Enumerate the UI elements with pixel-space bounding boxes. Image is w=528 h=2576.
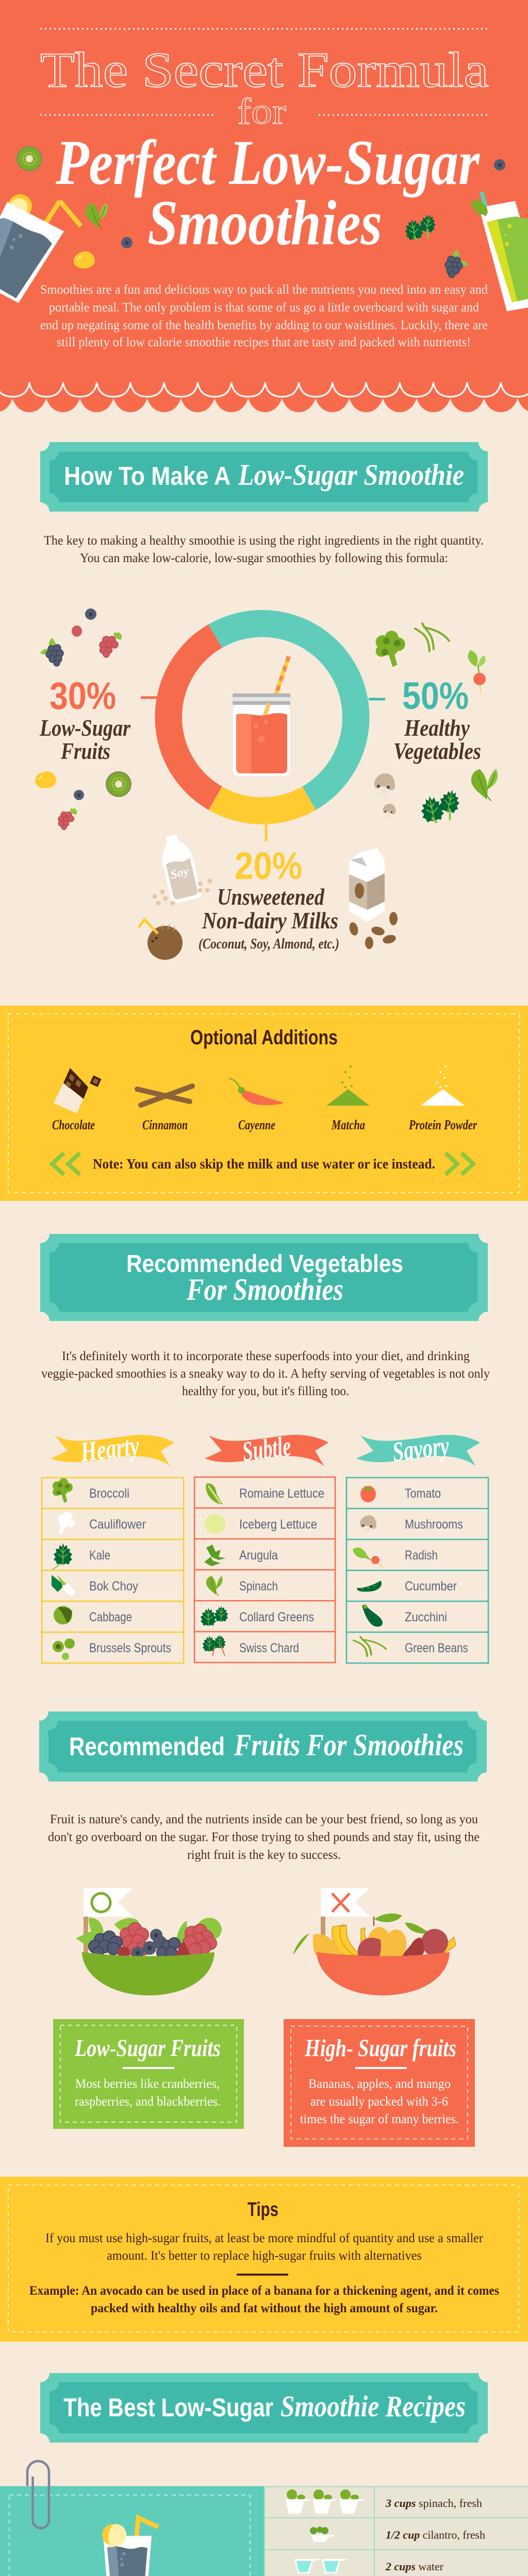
- icon: iceberg lettuce: [205, 1514, 225, 1534]
- icon: cabbage: [54, 1606, 72, 1624]
- label: 20% unsweetened non-dairy milks: (Coconut, Soy, Almond, etc.): [199, 936, 339, 952]
- title line: The Secret Formula: The Secret Formula: [40, 42, 489, 97]
- icon: cinnamon: [137, 1086, 192, 1105]
- icon: brussels sprouts: [53, 1638, 75, 1660]
- icon: almond milk carton: [348, 848, 398, 949]
- intro paragraph: Smoothies are a fun and delicious way to pack all the nutrients you need into an easy and: [40, 283, 488, 297]
- recipe: Lemon Blueberry Cooler: [0, 2461, 528, 2576]
- label: 30% low-sugar fruits: 30%: [50, 674, 116, 717]
- title word: for: for: [237, 91, 286, 132]
- icon: green beans: [354, 1637, 386, 1656]
- icon: kiwi: [16, 146, 42, 172]
- banner: How To Make A Low-Sugar Smoothie: Low-Sugar Smoothie: [238, 458, 464, 492]
- banner: Recommended Vegetables For Smoothies: Recommended Vegetables: [126, 1250, 403, 1278]
- labels: additions: Cayenne: [238, 1117, 275, 1132]
- table: subtle vegetables: Arugula: [239, 1548, 278, 1563]
- icon: kale: [53, 1543, 72, 1569]
- table: hearty vegetables: Kale: [89, 1548, 110, 1563]
- label: 50% healthy vegetables: Healthy: [404, 715, 470, 741]
- text: vegetables intro: It's definitely worth it to incorporate these superfoods into your diet, and drinking: [62, 1349, 470, 1363]
- panel: header: [0, 0, 528, 413]
- icon: broccoli: [53, 1478, 73, 1503]
- card: high-sugar fruits: are usually packed with 3-6: [310, 2095, 448, 2109]
- label: 20% unsweetened non-dairy milks: 20%: [235, 844, 302, 887]
- ribbon: Savory: [356, 1430, 480, 1467]
- text: vegetables intro: healthy for you, but it's filling too.: [182, 1384, 349, 1398]
- icon: mushroom: [360, 1515, 376, 1533]
- card: high-sugar fruits: High- Sugar fruits: [304, 2035, 456, 2062]
- intro paragraph: end up negating some of the health benefits by adding to our waistlines. Luckily, there are: [40, 318, 488, 332]
- card: low-sugar fruits: [53, 2019, 244, 2129]
- table: ingredients: 3 cups spinach, fresh: [385, 2497, 482, 2510]
- icon: tomato: [360, 1486, 376, 1502]
- icon: smoothie jar: [232, 656, 291, 776]
- table: savory vegetables: Mushrooms: [405, 1517, 463, 1532]
- icon: high-sugar fruit bowl: [293, 1888, 456, 1995]
- icon: blueberry left: [121, 237, 133, 248]
- banner: The Best Low-Sugar Smoothie Recipes: [40, 2373, 488, 2443]
- card: low-sugar fruits: Low-Sugar Fruits: [74, 2035, 221, 2062]
- icon: romaine: [206, 1483, 223, 1504]
- text: vegetables intro: veggie-packed smoothies is a sneaky way to do it. A hefty serving of vegetables is not only: [41, 1367, 490, 1381]
- table: hearty vegetables: Cabbage: [89, 1610, 132, 1624]
- text: formula intro: [44, 534, 484, 565]
- text: fruits intro: don't go overboard on the sugar. For those trying to shed pounds and stay fit, using the: [48, 1830, 480, 1844]
- text: vegetables intro: [41, 1349, 490, 1398]
- text: tip body: If you must use high-sugar fruits, at least be more mindful of quantity and use a smaller: [45, 2231, 484, 2245]
- text: tip example: Example: An avocado can be used in place of a banana for a thickening agent, and it comes: [29, 2284, 499, 2298]
- heading: Tips: Tips: [248, 2199, 278, 2221]
- icon: soy milk bottle: Soy: [169, 865, 190, 882]
- table: subtle vegetables: Romaine Lettuce: [239, 1486, 324, 1501]
- chart: formula donut: [141, 623, 385, 841]
- icon: zucchini: [362, 1604, 383, 1626]
- icon: radish: [353, 1548, 383, 1567]
- icon: coconut: [139, 920, 183, 960]
- labels: additions: Cinnamon: [142, 1117, 188, 1132]
- text: formula intro: You can make low-calorie, low-sugar smoothies by following this formula:: [80, 551, 448, 565]
- label: 50% healthy vegetables: Vegetables: [393, 738, 481, 764]
- text: fruits intro: Fruit is nature's candy, and the nutrients inside can be your best friend, so long as you: [50, 1812, 478, 1826]
- banner: How To Make A Low-Sugar Smoothie: [40, 442, 488, 512]
- table: savory vegetables: Radish: [405, 1548, 438, 1563]
- icons: fruits group: [35, 608, 131, 829]
- icon: spinach: [86, 202, 108, 229]
- text: tip example: packed with healthy oils and fat without the high amount of sugar.: [91, 2301, 438, 2315]
- card: high-sugar fruits: times the sugar of many berries.: [300, 2112, 459, 2126]
- table: subtle vegetables: [194, 1477, 335, 1663]
- table: hearty vegetables: [42, 1478, 184, 1663]
- table: subtle vegetables: Iceberg Lettuce: [239, 1517, 317, 1532]
- banner: The Best Low-Sugar Smoothie Recipes: Smoothie Recipes: [280, 2389, 466, 2423]
- label: 30% low-sugar fruits: Low-Sugar: [39, 715, 131, 741]
- title line: Smoothies: Smoothies: [147, 188, 382, 258]
- icon: low-sugar berry bowl: [76, 1888, 222, 1995]
- table: savory vegetables: Tomato: [405, 1486, 441, 1501]
- intro paragraph: portable meal. The only problem is that some of us go a little overboard with sugar and: [49, 301, 479, 314]
- text: tip body: amount. It's better to replace high-sugar fruits with alternatives: [107, 2249, 422, 2263]
- label: 20% unsweetened non-dairy milks: Unsweetened: [217, 884, 325, 910]
- label: 20% unsweetened non-dairy milks: Non-dairy Milks: [202, 907, 338, 934]
- label: 50% healthy vegetables: [393, 674, 481, 764]
- table: hearty vegetables: Cauliflower: [89, 1517, 146, 1532]
- icon: chocolate: [54, 1068, 102, 1113]
- card: high-sugar fruits: Bananas, apples, and mango: [308, 2077, 451, 2091]
- icon: blueberry cooler glass: [102, 2518, 158, 2576]
- note: skip the milk: Note: You can also skip the milk and use water or ice instead.: [93, 1156, 435, 1172]
- table: savory vegetables: Green Beans: [405, 1641, 468, 1655]
- table: savory vegetables: Cucumber: [405, 1579, 457, 1594]
- icon: arugula: [204, 1545, 226, 1566]
- table: hearty vegetables: Broccoli: [89, 1486, 129, 1501]
- banner: Recommended Fruits For Smoothies: [39, 1711, 487, 1782]
- icon: blackberry: [445, 249, 468, 278]
- banner: Recommended Vegetables For Smoothies: [40, 1234, 488, 1321]
- icon: cucumber: [357, 1581, 382, 1591]
- banner: Recommended Vegetables For Smoothies: For Smoothies: [186, 1273, 343, 1307]
- label: 30% low-sugar fruits: [39, 674, 131, 764]
- ribbon: Hearty: [51, 1430, 174, 1468]
- banner: The Best Low-Sugar Smoothie Recipes: The Best Low-Sugar: [63, 2393, 273, 2422]
- table: savory vegetables: [346, 1478, 488, 1663]
- table: ingredients: 1/2 cup cilantro, fresh: [386, 2529, 485, 2541]
- icon: protein powder: [421, 1065, 465, 1106]
- intro paragraph: still plenty of low calorie smoothie recipes that are tasty and packed with nutrients!: [57, 335, 471, 349]
- label: 50% healthy vegetables: 50%: [402, 674, 469, 717]
- table: subtle vegetables: Spinach: [239, 1579, 278, 1594]
- labels: additions: [52, 1117, 477, 1132]
- card: high-sugar fruits: [284, 2019, 475, 2147]
- card: low-sugar fruits: Most berries like cranberries,: [75, 2077, 220, 2091]
- banner: How To Make A Low-Sugar Smoothie: How To Make A: [64, 462, 230, 490]
- labels: additions: Matcha: [331, 1117, 365, 1132]
- arrows: left chevrons: [52, 1153, 80, 1175]
- intro paragraph: [40, 283, 488, 349]
- icon: left blueberry drink: [0, 194, 81, 303]
- icon: right green drink: [470, 192, 528, 311]
- text: tip example: [29, 2284, 499, 2315]
- icon: kale: [403, 213, 438, 242]
- table: savory vegetables: Zucchini: [405, 1610, 447, 1624]
- ribbon: Savory: Savory: [391, 1430, 451, 1467]
- arrows: right chevrons: [446, 1153, 473, 1175]
- text: fruits intro: right fruit is the key to success.: [187, 1848, 341, 1862]
- table: ingredients: [264, 2486, 528, 2576]
- icon: blueberry right: [494, 159, 505, 171]
- icon: swiss chard: [203, 1635, 225, 1656]
- icon: spinach: [206, 1575, 223, 1596]
- label: 30% low-sugar fruits: Fruits: [60, 738, 110, 764]
- table: ingredients: 2 cups water: [385, 2560, 444, 2573]
- icon: paperclip: [27, 2461, 49, 2528]
- ribbon: Hearty: Hearty: [78, 1430, 141, 1468]
- ribbon: Subtle: [205, 1430, 328, 1467]
- icon: collard greens: [201, 1606, 228, 1626]
- icon: soy milk bottle: [153, 832, 212, 906]
- labels: additions: Chocolate: [52, 1117, 95, 1132]
- icon: cauliflower: [58, 1512, 75, 1534]
- icon: cayenne pepper: [229, 1078, 284, 1105]
- table: subtle vegetables: Swiss Chard: [239, 1641, 299, 1655]
- panel: optional additions: [0, 1006, 528, 1201]
- panel: tips: [0, 2177, 528, 2342]
- icon: lemon: [74, 251, 95, 268]
- icon: matcha powder: [326, 1065, 370, 1106]
- table: hearty vegetables: Bok Choy: [89, 1579, 138, 1594]
- banner: Recommended Fruits For Smoothies: Fruits For Smoothies: [234, 1728, 464, 1762]
- panel: recipe card: [0, 2486, 264, 2576]
- card: low-sugar fruits: raspberries, and blackberries.: [75, 2095, 221, 2109]
- ribbon: Subtle: Subtle: [241, 1430, 292, 1467]
- icon: bok choy: [52, 1574, 76, 1596]
- labels: additions: Protein Powder: [408, 1117, 477, 1132]
- banner: Recommended Fruits For Smoothies: Recommended: [69, 1732, 225, 1761]
- label: 20% unsweetened non-dairy milks: [199, 844, 339, 952]
- table: hearty vegetables: Brussels Sprouts: [89, 1641, 171, 1655]
- icons: vegetables group: [374, 623, 498, 824]
- text: tip body: [45, 2231, 484, 2263]
- table: subtle vegetables: Collard Greens: [239, 1610, 314, 1624]
- text: formula intro: The key to making a healthy smoothie is using the right ingredients in the right quantity.: [44, 534, 484, 548]
- text: fruits intro: [48, 1812, 480, 1862]
- heading: Optional Additions: Optional Additions: [190, 1026, 338, 1049]
